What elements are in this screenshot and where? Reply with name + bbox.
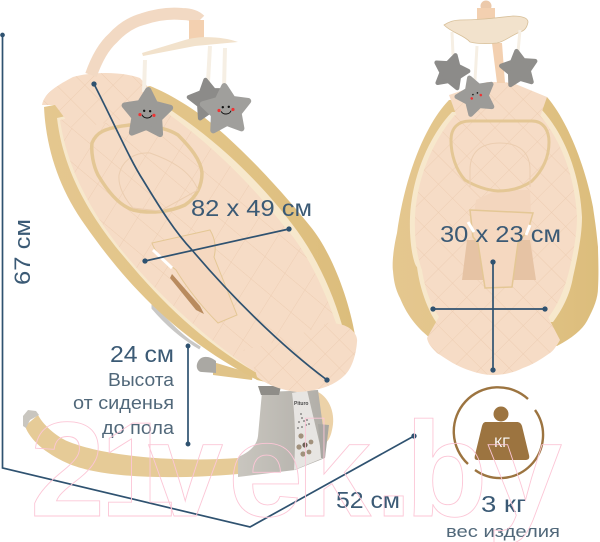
- rocker base: [23, 410, 238, 477]
- lower seat: [440, 282, 547, 315]
- product: swing side view: [23, 14, 357, 477]
- product: swing front view: [393, 0, 598, 375]
- label: seat size front: 30 x 23 см: [440, 221, 561, 247]
- label: total height: 67 см: [10, 219, 35, 285]
- watermark: 21vek.by: [30, 394, 562, 542]
- weight caption: [446, 491, 560, 541]
- caption: product weight: вес изделия: [446, 522, 560, 541]
- icon: weight: [454, 387, 543, 478]
- front star centre: [452, 72, 498, 117]
- mobile bar: [142, 37, 238, 56]
- star toy rear: [186, 77, 231, 120]
- front cream trim: [410, 110, 582, 322]
- caption line 3: до пола: [102, 418, 175, 438]
- front width line: [431, 307, 547, 311]
- seat height line: [186, 344, 190, 446]
- seat height caption: [73, 341, 175, 438]
- front star right: [500, 49, 538, 86]
- front seat fabric: [415, 113, 577, 318]
- front star left: [432, 51, 471, 90]
- front mobile tray: [444, 16, 528, 44]
- seat fabric: [60, 100, 336, 372]
- value: weight: 3 кг: [481, 491, 526, 517]
- seat length line: [92, 82, 329, 382]
- head pad: [92, 125, 202, 212]
- label: depth: 52 см: [336, 487, 400, 513]
- arched mobile arm: [91, 14, 204, 75]
- star toy right: [202, 84, 250, 131]
- front foot flap: [427, 315, 560, 375]
- front harness: [468, 210, 533, 288]
- value: seat height: 24 см: [110, 341, 174, 367]
- harness pad: [152, 230, 237, 323]
- head flap: [42, 73, 148, 129]
- grey underside: [153, 305, 200, 348]
- caption line 2: от сиденья: [73, 393, 174, 413]
- beige rear hump: [318, 392, 333, 444]
- front head flap: [449, 82, 547, 117]
- grey stand: [238, 386, 329, 477]
- front mobile strings: [452, 30, 520, 80]
- seat recess: [462, 240, 536, 280]
- front mobile post: [492, 43, 505, 83]
- front mobile block: [477, 0, 495, 26]
- front head pad: [451, 121, 549, 191]
- star toy left: [123, 89, 171, 135]
- front wood shell: [393, 97, 598, 346]
- mobile strings: [144, 46, 225, 92]
- wood shell: [44, 86, 355, 390]
- grey stand: Pituro: [294, 401, 308, 407]
- rear support arm: [197, 357, 253, 380]
- cream trim: [57, 97, 342, 372]
- seat width line: [143, 227, 291, 263]
- seat centre column: [467, 190, 533, 262]
- label: seat size side: 82 x 49 см: [191, 195, 312, 221]
- height and footprint outline: [1, 34, 416, 527]
- icon: weight: КГ: [494, 434, 510, 450]
- caption line 1: Высота: [108, 370, 175, 390]
- front length line: [491, 260, 495, 372]
- foot flap: [243, 322, 357, 392]
